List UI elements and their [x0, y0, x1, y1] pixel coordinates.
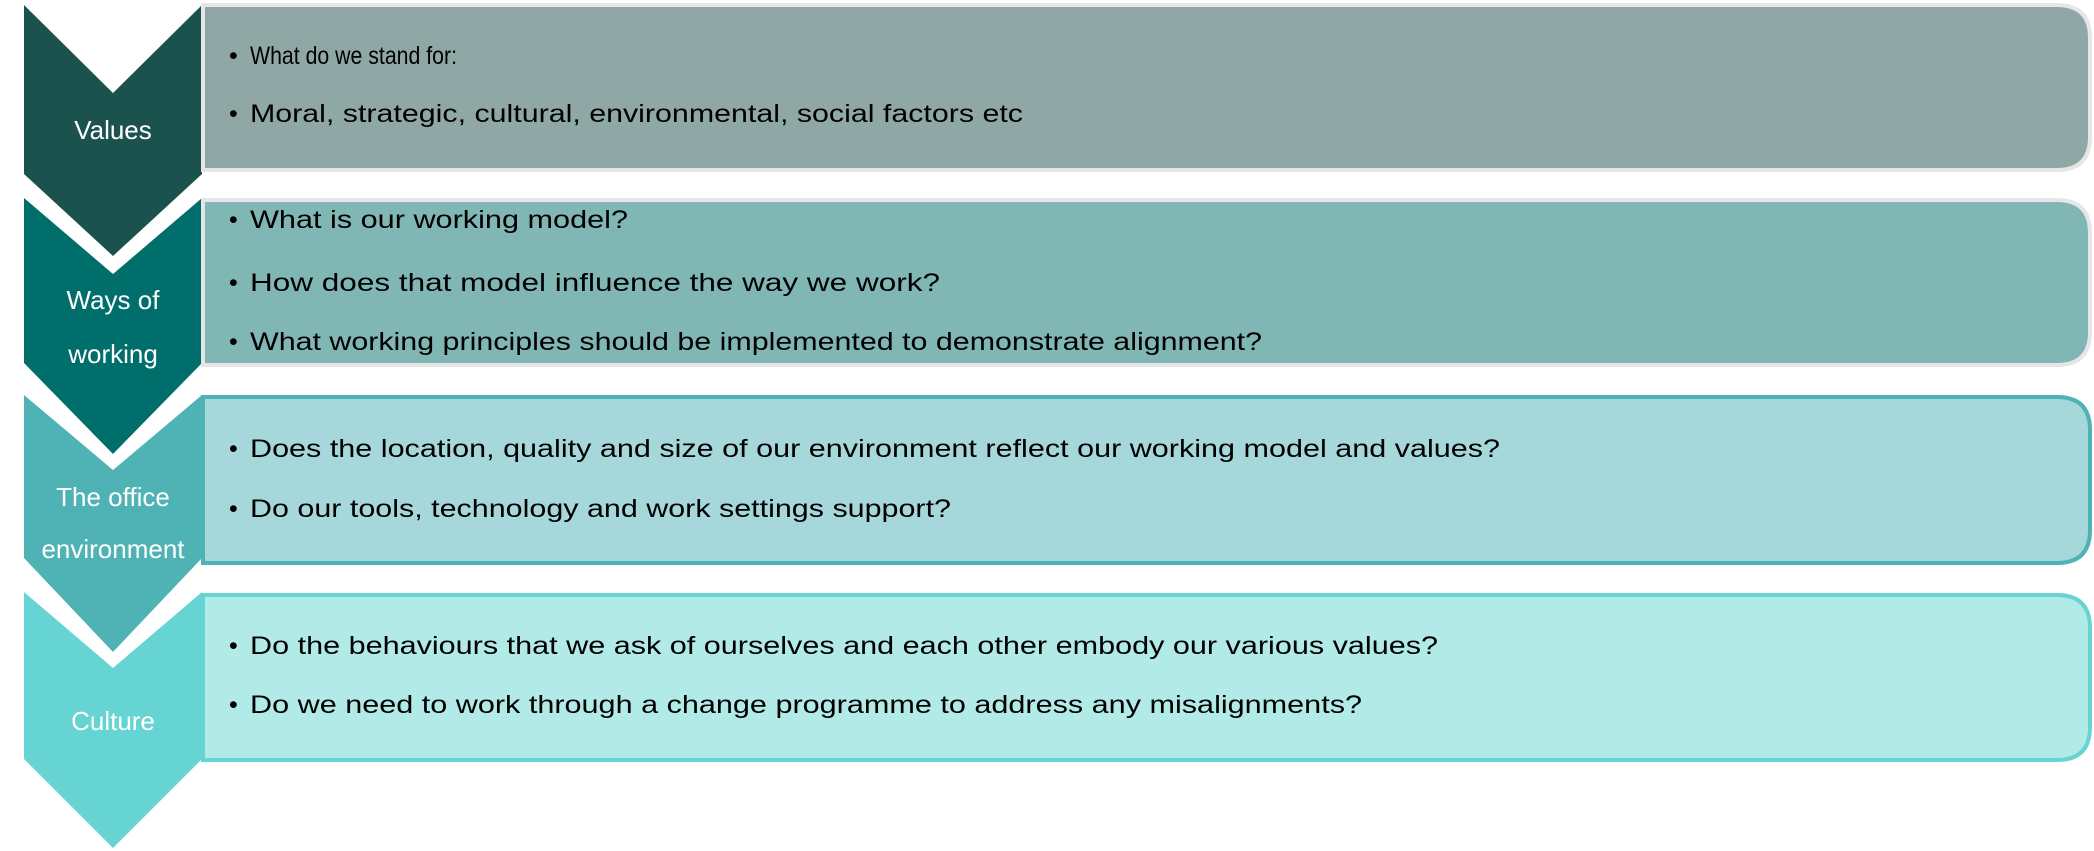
- text: culture bullets: [229, 632, 1438, 719]
- panel: ways of working: [24, 198, 2090, 454]
- text: ways bullets: What is our working model?: [250, 206, 628, 234]
- text: office bullets: Does the location, quality and size of our environment reflect our working model and values?: [250, 435, 1500, 463]
- panel: office environment: environment: [41, 534, 185, 564]
- text: ways bullets: [229, 206, 1262, 356]
- text: culture bullets: •: [229, 632, 238, 660]
- text: ways bullets: •: [229, 328, 238, 356]
- label: values: Values: [74, 115, 152, 145]
- text: office bullets: [229, 435, 1500, 523]
- panel: values: [24, 5, 2090, 256]
- box: values: [203, 5, 2090, 170]
- text: culture bullets: Do we need to work through a change programme to address any misalignments?: [250, 691, 1362, 719]
- panel: ways of working: working: [67, 339, 158, 369]
- chevron: values: [24, 5, 202, 256]
- text: ways bullets: What working principles should be implemented to demonstrate alignment?: [250, 328, 1262, 356]
- label: culture: Culture: [71, 706, 155, 736]
- text: values bullets: •: [229, 42, 238, 70]
- text: values bullets: [229, 42, 1023, 128]
- panel: culture: [24, 592, 2090, 848]
- chevron: culture: [24, 592, 202, 848]
- text: office bullets: Do our tools, technology and work settings support?: [250, 495, 951, 523]
- label: office: The office: [56, 482, 170, 512]
- box: ways of working: [203, 200, 2090, 365]
- text: values bullets: Moral, strategic, cultural, environmental, social factors etc: [250, 100, 1023, 128]
- chevron: office: [24, 395, 202, 652]
- label: ways of working: Ways of: [67, 285, 160, 315]
- box: culture: [203, 595, 2090, 760]
- text: ways bullets: How does that model influence the way we work?: [250, 269, 940, 297]
- text: ways bullets: •: [229, 269, 238, 297]
- text: culture bullets: •: [229, 691, 238, 719]
- text: values bullets: What do we stand for:: [250, 42, 457, 70]
- text: office bullets: •: [229, 435, 238, 463]
- text: culture bullets: Do the behaviours that we ask of ourselves and each other embody our various values?: [250, 632, 1438, 660]
- text: ways bullets: •: [229, 206, 238, 234]
- text: values bullets: •: [229, 100, 238, 128]
- chevron: ways of working: [24, 198, 202, 454]
- text: office bullets: •: [229, 495, 238, 523]
- panel: office environment: [24, 395, 2090, 652]
- box: office: [203, 397, 2090, 563]
